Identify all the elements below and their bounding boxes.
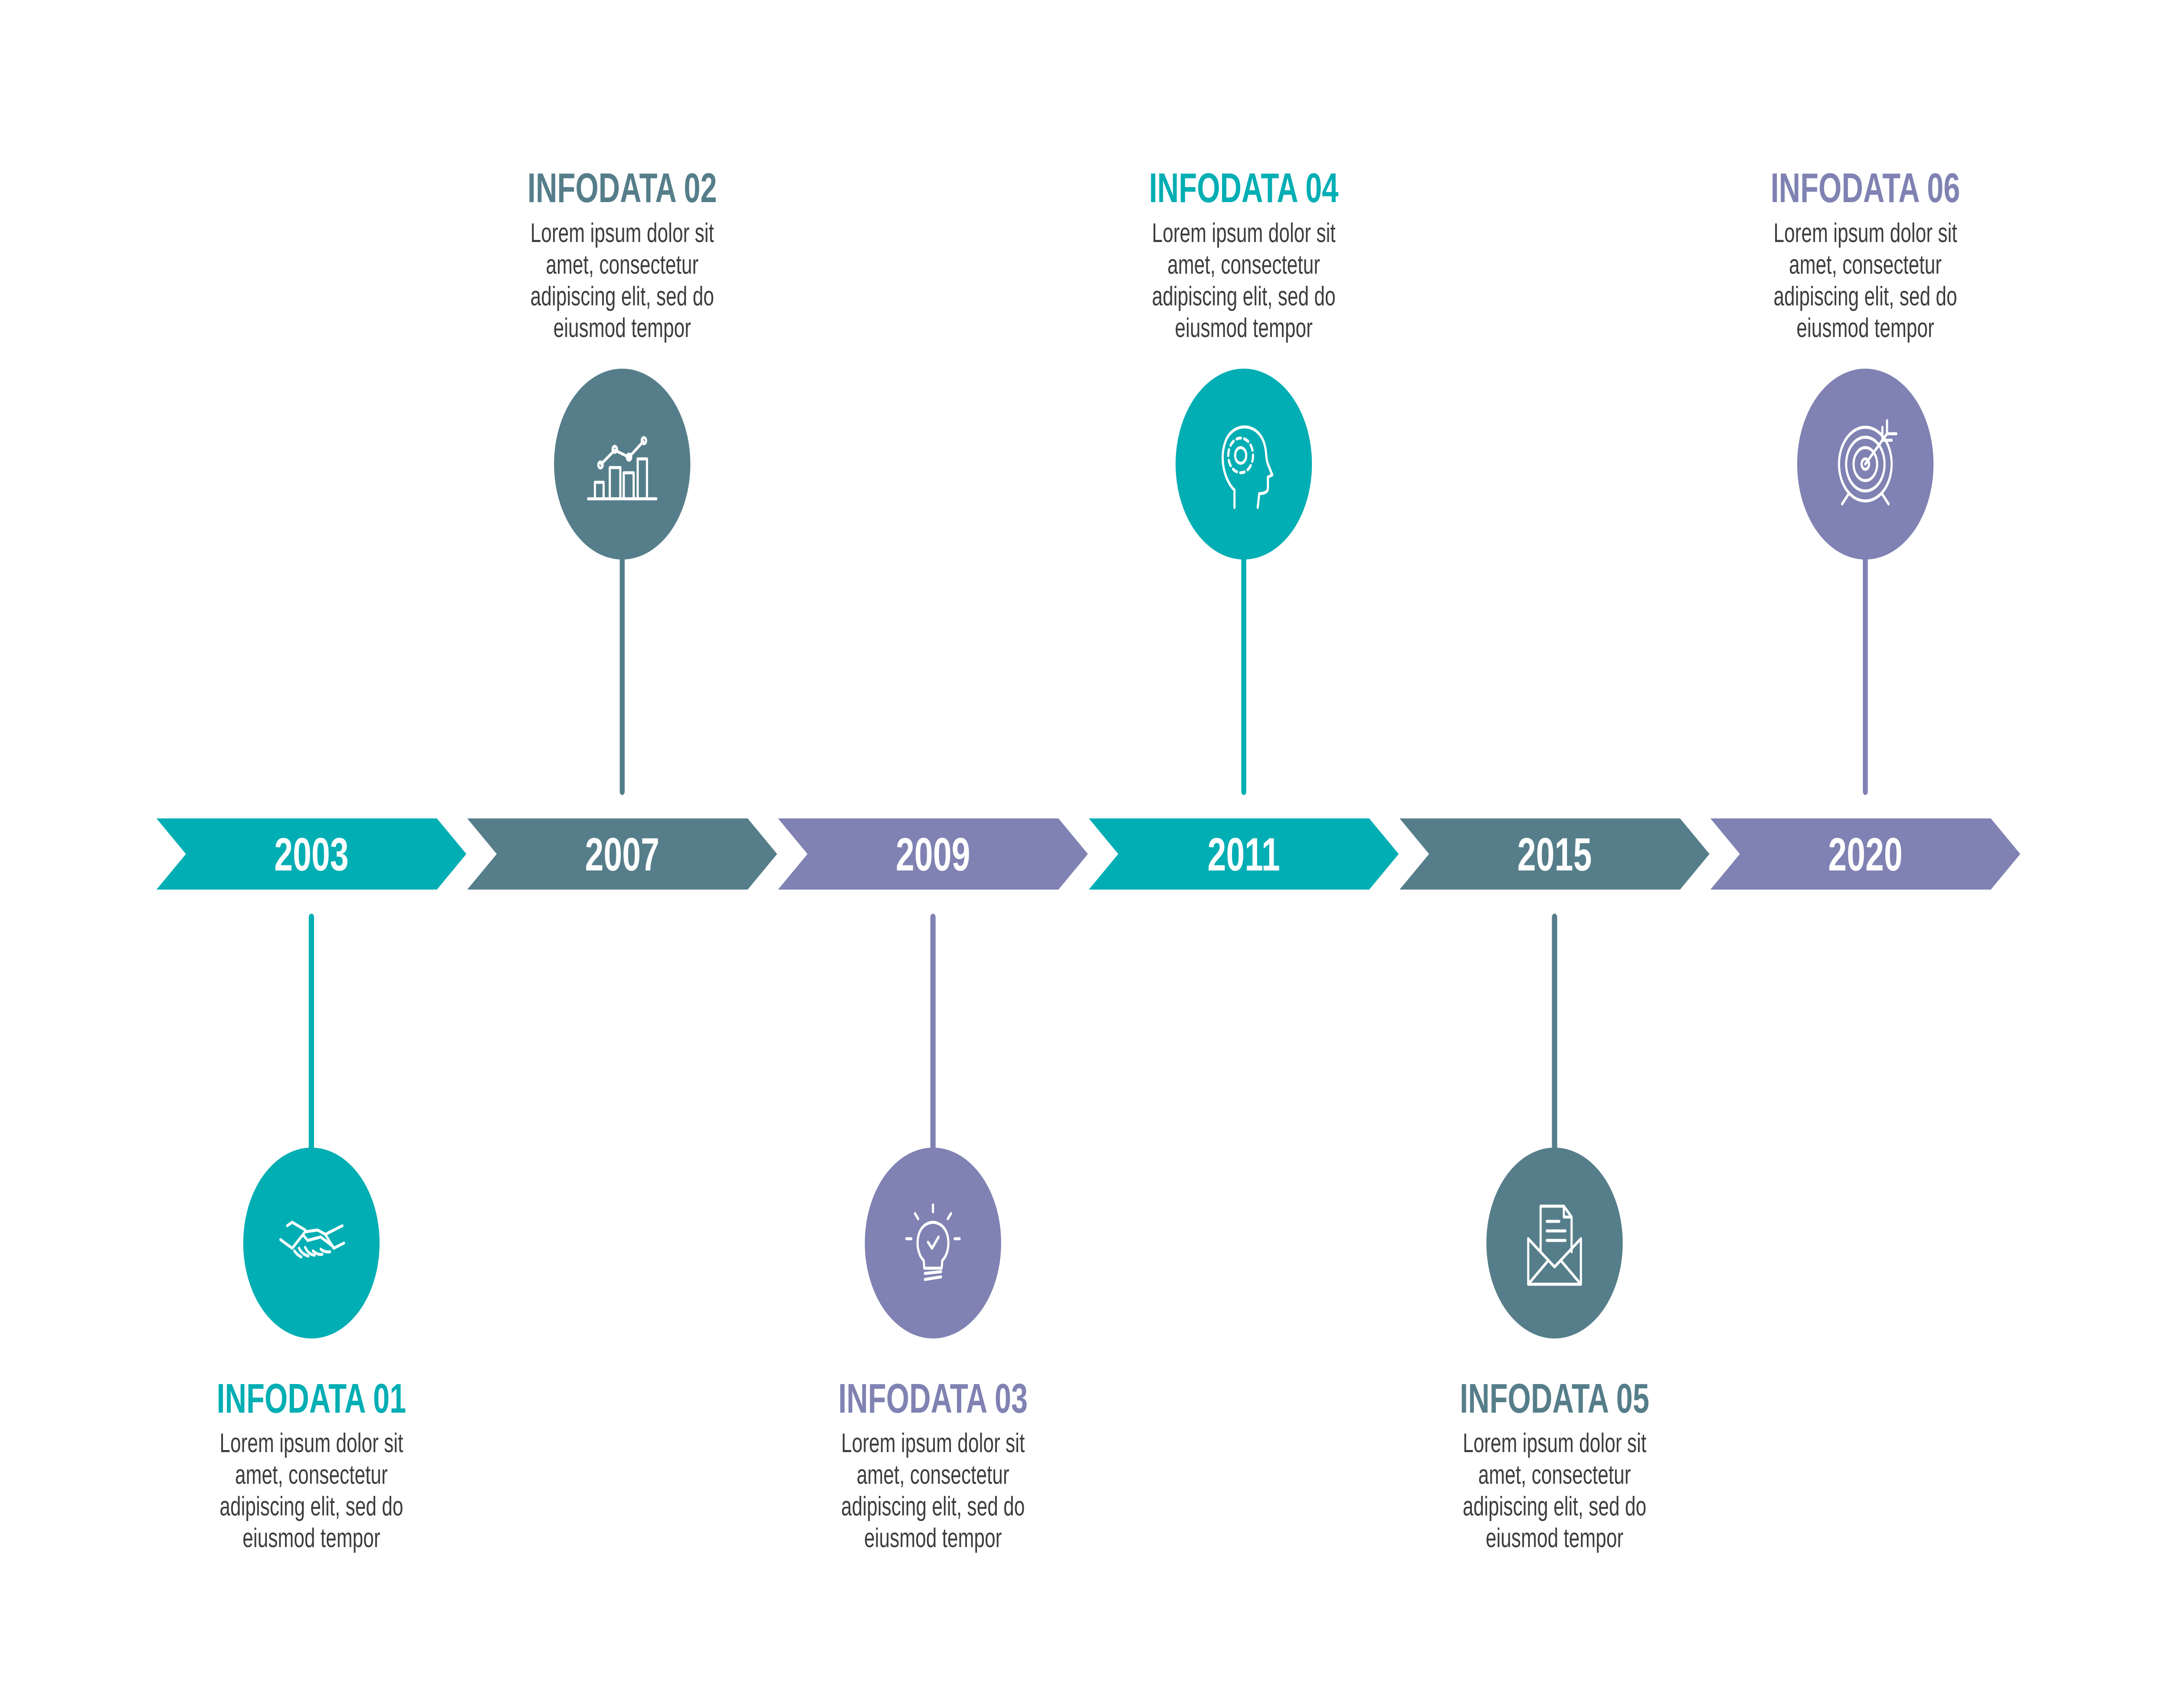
text 01: amet, consectetur xyxy=(235,1460,388,1490)
arrow 2009 xyxy=(778,818,1088,890)
icon: head with gear xyxy=(1223,427,1272,507)
circle 03 xyxy=(865,1148,1001,1338)
arrow 2015: 2015 xyxy=(1517,828,1592,880)
circle 04 xyxy=(1176,369,1312,560)
title 01: INFODATA 01 xyxy=(216,1375,406,1422)
arrow 2003 xyxy=(157,818,466,890)
title 04: INFODATA 04 xyxy=(1149,164,1339,211)
circle 02 xyxy=(554,369,690,560)
title 02: INFODATA 02 xyxy=(528,164,717,211)
text 03: eiusmod tempor xyxy=(864,1523,1002,1553)
arrow 2011 xyxy=(1089,818,1399,890)
text 05: eiusmod tempor xyxy=(1486,1523,1623,1553)
circle 06 xyxy=(1797,369,1933,560)
text 04: adipiscing elit, sed do xyxy=(1152,281,1336,311)
arrow 2007: 2007 xyxy=(585,828,659,880)
arrow 2003: 2003 xyxy=(274,828,349,880)
text 02: amet, consectetur xyxy=(546,250,698,280)
circle 05 xyxy=(1486,1148,1623,1338)
text 03: adipiscing elit, sed do xyxy=(841,1492,1025,1521)
stem 06 xyxy=(1862,555,1869,792)
text 06: amet, consectetur xyxy=(1789,250,1942,280)
text 02: adipiscing elit, sed do xyxy=(531,281,714,311)
arrow 2015 xyxy=(1399,818,1710,890)
stem 03 xyxy=(929,917,937,1154)
arrow 2007 xyxy=(467,818,777,890)
text 01: eiusmod tempor xyxy=(242,1523,380,1553)
text 02: eiusmod tempor xyxy=(554,313,691,343)
arrow 2011: 2011 xyxy=(1207,828,1280,880)
text 05: Lorem ipsum dolor sit xyxy=(1463,1428,1646,1458)
text 02: Lorem ipsum dolor sit xyxy=(531,218,714,248)
title 05: INFODATA 05 xyxy=(1460,1375,1649,1422)
arrow 2020 xyxy=(1710,818,2020,890)
text 01: Lorem ipsum dolor sit xyxy=(220,1428,403,1458)
text 03: amet, consectetur xyxy=(857,1460,1009,1490)
title 06: INFODATA 06 xyxy=(1771,164,1960,211)
item 01 (bottom) xyxy=(216,917,406,1553)
item 06 (top) xyxy=(1771,164,1960,792)
title 03: INFODATA 03 xyxy=(838,1375,1028,1422)
text 04: eiusmod tempor xyxy=(1175,313,1313,343)
stem 02 xyxy=(619,555,626,792)
text 05: amet, consectetur xyxy=(1478,1460,1631,1490)
item 04 (top) xyxy=(1149,164,1339,792)
icon: target xyxy=(1839,421,1896,504)
item 05 (bottom) xyxy=(1460,917,1649,1553)
text 01: adipiscing elit, sed do xyxy=(220,1492,403,1521)
circle 01 xyxy=(243,1148,380,1338)
text 04: Lorem ipsum dolor sit xyxy=(1152,218,1336,248)
icon: bar chart xyxy=(588,438,656,499)
stem 04 xyxy=(1240,555,1247,792)
text 05: adipiscing elit, sed do xyxy=(1463,1492,1646,1521)
arrow 2020: 2020 xyxy=(1828,828,1903,880)
text 06: adipiscing elit, sed do xyxy=(1773,281,1957,311)
stem 05 xyxy=(1551,917,1558,1154)
item 03 (bottom) xyxy=(838,917,1028,1553)
item 02 (top) xyxy=(528,164,717,792)
text 04: amet, consectetur xyxy=(1167,250,1320,280)
text 03: Lorem ipsum dolor sit xyxy=(841,1428,1025,1458)
icon: handshake xyxy=(280,1222,344,1257)
icon: envelope with document xyxy=(1528,1206,1581,1284)
stem 01 xyxy=(308,917,315,1154)
text 06: Lorem ipsum dolor sit xyxy=(1773,218,1957,248)
arrow 2009: 2009 xyxy=(896,828,970,880)
text 06: eiusmod tempor xyxy=(1796,313,1934,343)
icon: lightbulb xyxy=(906,1205,960,1279)
